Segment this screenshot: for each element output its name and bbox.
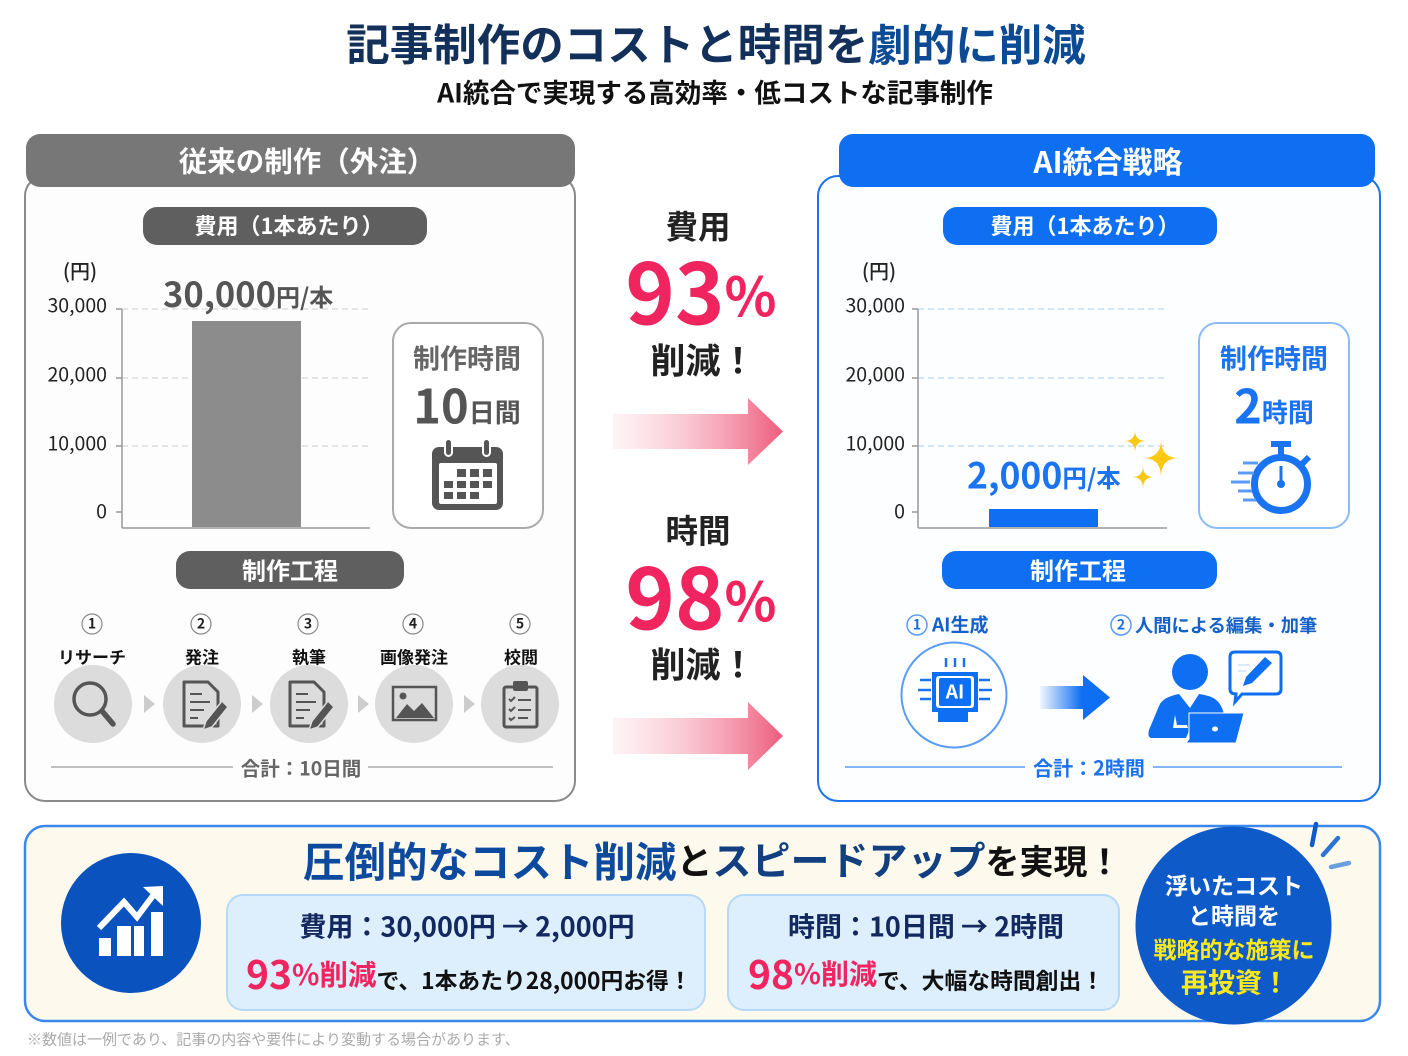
comparison: time reduction: 時間 <box>665 506 731 552</box>
comparison: cost reduction: 費用 <box>665 202 731 248</box>
comparison: cost reduction: % <box>725 252 777 332</box>
step 4: image order: 4 <box>409 614 417 634</box>
callout: time summary <box>728 895 1119 1010</box>
step 2: human editing <box>1111 612 1317 743</box>
time card: AI: 時間 <box>1262 392 1314 430</box>
arrow: step 1 to 2 <box>144 695 155 713</box>
comparison: time reduction: 98 <box>625 534 725 654</box>
comparison: time reduction: 削減！ <box>650 638 756 688</box>
callout: time summary: 98%削減 <box>748 945 877 1001</box>
step 5: proofreading: 5 <box>516 614 524 634</box>
bar chart: traditional cost <box>47 256 370 528</box>
bar chart: AI cost: 20,000 <box>845 358 905 388</box>
panel header: AI <box>839 134 1375 187</box>
icon: stopwatch <box>1231 441 1309 510</box>
process pill: traditional <box>176 551 404 589</box>
callout: cost summary: 費用：30,000円 → 2,000円 <box>299 906 635 944</box>
comparison: time reduction: % <box>725 558 777 636</box>
callout: cost summary: 93%削減 <box>246 945 376 1001</box>
step 1: research: 1 <box>88 614 96 634</box>
bar chart: AI cost: 0 <box>894 496 905 524</box>
callout: reinvest badge <box>1136 824 1349 1024</box>
arrow: time <box>613 702 783 770</box>
title: 記事制作のコストと時間を劇的に削減 <box>346 10 1086 74</box>
callout: cost summary: で、1本あたり28,000円お得！ <box>376 962 692 996</box>
summary heading: 圧倒的なコスト削減とスピードアップを実現！ <box>303 829 1122 889</box>
cost pill: AI <box>943 207 1217 245</box>
step 1: AI generation: AI生成 <box>931 610 988 638</box>
step 2: human editing: 人間による編集・加筆 <box>1135 612 1317 638</box>
total: traditional: 合計：10日間 <box>241 752 361 782</box>
callout: reinvest badge: 再投資！ <box>1181 962 1289 1000</box>
time card: traditional: 日間 <box>469 392 521 430</box>
comparison: cost reduction <box>613 202 783 465</box>
bar chart: AI cost: 10,000 <box>845 428 905 456</box>
callout: cost summary <box>227 895 705 1010</box>
step 4: image order <box>375 614 453 743</box>
bar chart: AI cost: 30,000 <box>845 290 905 318</box>
panel header: traditional <box>26 134 575 187</box>
time card: AI <box>1199 323 1349 528</box>
step 2: order: 発注 <box>185 644 219 668</box>
step 1: research: リサーチ <box>58 644 126 668</box>
bar chart: AI cost: 円/本 <box>1062 460 1121 494</box>
arrow: step 2 to 3 <box>252 695 263 713</box>
bar chart: traditional cost: 20,000 <box>47 358 107 388</box>
callout: reinvest badge: 戦略的な施策に <box>1154 931 1314 965</box>
bar chart: traditional cost: 10,000 <box>47 428 107 456</box>
footnote: ※数値は一例であり、記事の内容や要件により変動する場合があります、 <box>27 1028 520 1050</box>
step 5: proofreading <box>481 614 559 743</box>
panel header: AI: AI統合戦略 <box>1032 138 1183 182</box>
step 4: image order: 画像発注 <box>380 644 448 668</box>
rays <box>1312 824 1349 867</box>
comparison: time reduction <box>613 506 783 770</box>
bar chart: traditional cost: 0 <box>96 496 107 524</box>
step 1: AI generation <box>902 610 1006 748</box>
comparison: cost reduction: 93 <box>625 228 725 350</box>
callout: reinvest badge: と時間を <box>1188 897 1280 931</box>
bar chart: AI cost: 2,000 <box>967 448 1062 500</box>
time card: AI: 2 <box>1234 368 1262 438</box>
comparison: cost reduction: 削減！ <box>650 334 756 384</box>
arrow: step 3 to 4 <box>358 695 369 713</box>
bar chart: traditional cost: 30,000 <box>47 290 107 318</box>
arrow: cost <box>613 398 783 465</box>
process pill: AI: 制作工程 <box>1030 552 1126 586</box>
step 2: order <box>163 614 241 743</box>
step 2: human editing: 2 <box>1117 614 1125 634</box>
step 5: proofreading: 校閲 <box>504 644 538 668</box>
icon: person with laptop <box>1148 652 1281 743</box>
time card: traditional <box>393 323 543 528</box>
panel header: traditional: 従来の制作（外注） <box>179 140 435 180</box>
arrow: AI to human <box>1040 675 1110 720</box>
bar chart: AI cost <box>845 256 1179 528</box>
step 3: writing <box>270 614 348 743</box>
icon: sparkles <box>1124 430 1179 489</box>
panel: AI integrated strategy <box>818 134 1380 801</box>
step 1: AI generation: 1 <box>913 614 921 634</box>
arrow: step 4 to 5 <box>464 695 475 713</box>
time card: traditional: 制作時間 <box>413 338 521 376</box>
icon: calendar <box>432 439 503 510</box>
cost pill: 費用（1本あたり） <box>195 209 383 241</box>
process pill: AI <box>942 551 1217 589</box>
cost pill <box>143 207 427 245</box>
bar chart: traditional cost: (円) <box>63 256 97 284</box>
step 2: order: 2 <box>197 614 205 634</box>
panel: traditional production <box>25 134 575 801</box>
subtitle: AI統合で実現する高効率・低コストな記事制作 <box>436 72 993 110</box>
icon: growth chart <box>61 853 201 993</box>
callout: time summary: 時間：10日間 → 2時間 <box>788 906 1064 944</box>
icon: AI chip: AI <box>945 678 964 704</box>
time card: AI: 制作時間 <box>1220 338 1328 376</box>
total: AI: 合計：2時間 <box>1033 752 1145 782</box>
bar chart: AI cost: (円) <box>862 256 896 284</box>
step 3: writing: 執筆 <box>292 644 326 668</box>
callout: reinvest badge: 浮いたコスト <box>1165 867 1303 901</box>
process pill: traditional: 制作工程 <box>242 552 338 586</box>
bar chart: traditional cost: 円/本 <box>276 278 333 312</box>
time card: traditional: 10 <box>413 368 469 438</box>
bar chart: traditional cost: 30,000 <box>163 267 276 317</box>
step 3: writing: 3 <box>304 614 312 634</box>
step 1: research <box>54 614 132 743</box>
callout: time summary: で、大幅な時間創出！ <box>877 962 1104 996</box>
panel: summary <box>25 824 1380 1024</box>
cost pill: AI: 費用（1本あたり） <box>991 209 1179 241</box>
